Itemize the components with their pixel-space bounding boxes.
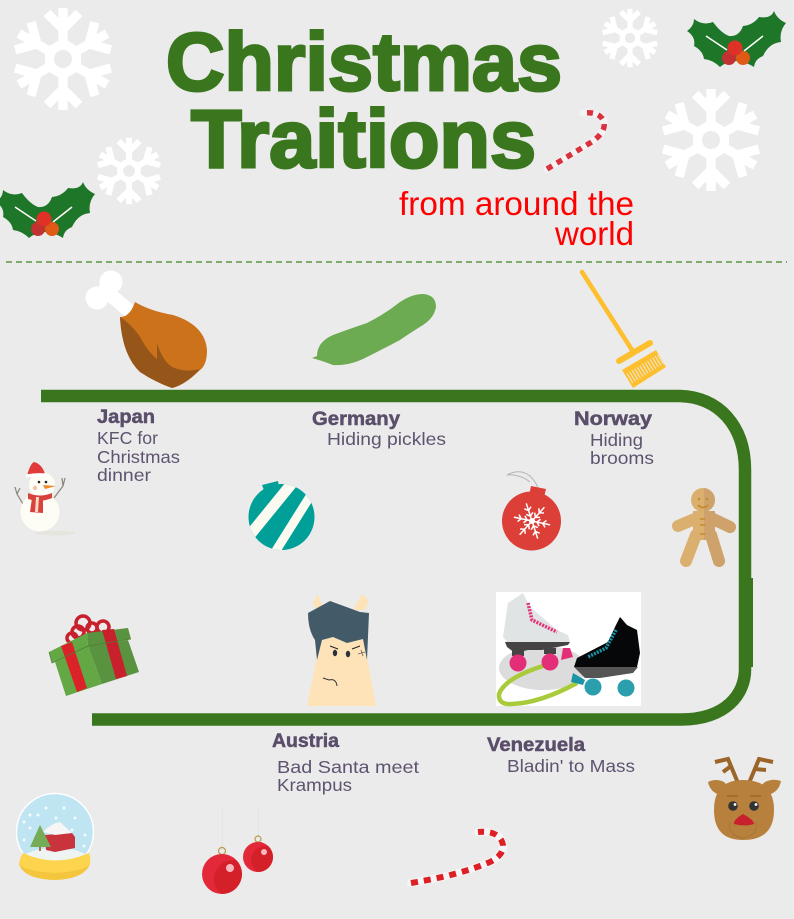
label: Austria: Bad Santa meet — [277, 757, 419, 777]
icon: pickle — [312, 294, 436, 365]
holly left — [0, 182, 95, 238]
snowflake small left — [95, 138, 163, 204]
icon: gift box — [49, 616, 139, 696]
icon: teal striped bauble — [248, 481, 314, 550]
timeline track — [41, 396, 753, 720]
title: Christmas — [166, 17, 562, 108]
title — [166, 17, 562, 185]
icon: broom — [582, 272, 666, 388]
icon: roller skates — [496, 592, 641, 706]
title: Traitions — [191, 94, 536, 185]
icon: turkey leg — [86, 270, 207, 388]
subtitle — [399, 185, 634, 252]
icon: snowman — [15, 462, 75, 536]
snowflake top left — [11, 8, 115, 110]
snowflake large right — [659, 89, 763, 191]
snowflake small top right — [600, 9, 660, 67]
label: Norway: brooms — [590, 448, 654, 468]
label: Austria — [272, 731, 419, 795]
label: Austria: Austria — [272, 731, 339, 752]
label: Venezuela — [487, 735, 635, 776]
label: Japan: dinner — [97, 465, 151, 485]
label: Germany: Hiding pickles — [327, 429, 446, 449]
icon: reindeer — [708, 759, 781, 840]
icon: candy cane bottom — [411, 832, 503, 883]
label: Norway — [574, 409, 654, 468]
label: Venezuela: Venezuela — [487, 735, 585, 756]
icon: red snowflake bauble — [502, 472, 561, 550]
label: Venezuela: Bladin' to Mass — [507, 756, 635, 776]
icon: snow globe — [16, 794, 94, 880]
label: Germany: Germany — [312, 409, 400, 430]
icon: Krampus face — [307, 594, 376, 706]
label: Germany — [312, 409, 446, 449]
holly top right — [687, 11, 786, 67]
label: Norway: Hiding — [590, 430, 643, 450]
label: Japan: Christmas — [97, 447, 180, 467]
subtitle: world — [554, 215, 634, 252]
label: Japan: Japan — [97, 407, 155, 428]
icon: gingerbread man — [678, 488, 730, 561]
label: Japan: KFC for — [97, 428, 158, 448]
label: Norway: Norway — [574, 409, 652, 430]
label: Austria: Krampus — [277, 775, 352, 795]
subtitle: from around the — [399, 185, 634, 222]
icon: candy cane near title — [547, 113, 604, 169]
label: Japan — [97, 407, 180, 485]
icon: red ornaments — [202, 835, 273, 894]
